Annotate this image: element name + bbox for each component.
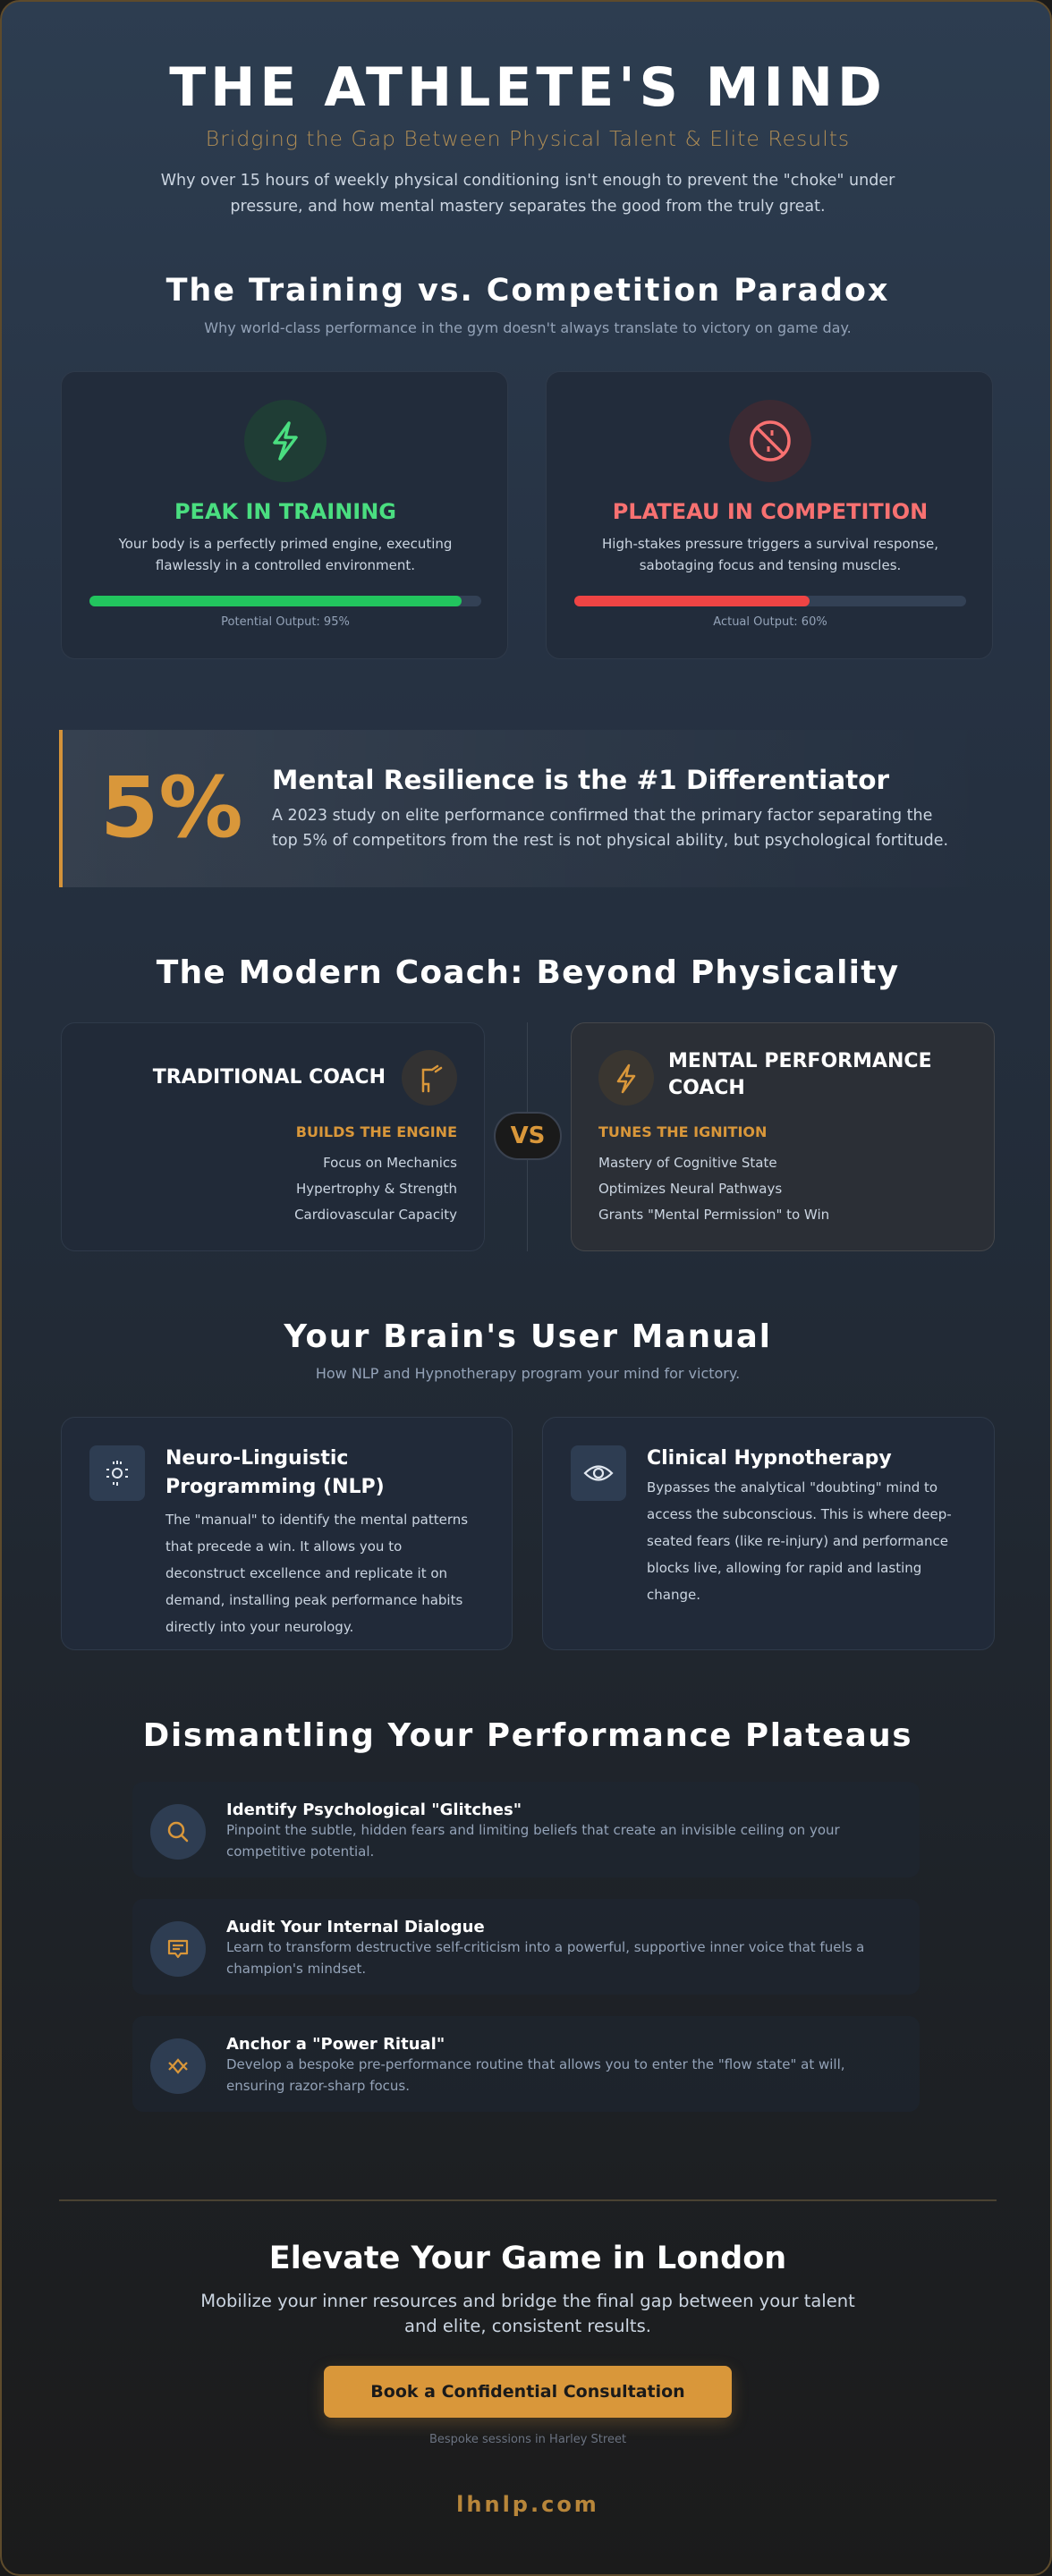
text: Pinpoint the subtle, hidden fears and limiting beliefs that create an invisible ceiling on your competitive potential. [226,1822,840,1860]
text: Identify Psychological "Glitches" [226,1801,522,1819]
icon: anchor star [150,2038,206,2094]
title [668,1050,932,1099]
text: Learn to transform destructive self-criticism into a powerful, supportive inner voice that fuels a champion's mindset. [226,1939,864,1977]
heading: CTA: Elevate Your Game in London [269,2241,786,2276]
label: BUILDS THE ENGINE [296,1123,457,1140]
title [165,1447,385,1498]
footer brand: lhnlp.com [456,2492,599,2517]
title: Programming (NLP) [165,1476,385,1498]
list: Cardiovascular Capacity [294,1207,457,1223]
title: THE ATHLETE'S MIND [169,56,887,119]
panel: plateau in competition [546,371,993,659]
title: MENTAL PERFORMANCE [668,1050,932,1072]
panel: peak in training [61,371,508,659]
description: High-stakes pressure triggers a survival response, sabotaging focus and tensing muscles. [602,536,938,573]
list: Mastery of Cognitive State [598,1155,777,1171]
heading: paradox: The Training vs. Competition Paradox [166,273,889,309]
title: TRADITIONAL COACH [153,1066,386,1089]
button: Book a Confidential Consultation [370,2382,685,2402]
title: PEAK IN TRAINING [174,499,396,524]
title: COACH [668,1077,745,1099]
icon: magnifier [150,1804,206,1860]
step: identify glitches [132,1782,920,1877]
progress bar 60% [574,596,966,606]
button note: Bespoke sessions in Harley Street [429,2433,626,2446]
callout: 5% statistic [59,730,997,887]
progress bar 95% [89,596,481,606]
text [226,1801,840,1860]
description: Your body is a perfectly primed engine, executing flawlessly in a controlled environment. [119,536,452,573]
button [324,2366,732,2418]
badge: VS [494,1112,562,1160]
list [294,1155,457,1223]
text [226,2035,845,2094]
subheading: user manual: How NLP and Hypnotherapy program your mind for victory. [316,1365,740,1382]
heading: user manual: Your Brain's User Manual [284,1318,772,1355]
icon: blocked red [729,400,811,482]
panel: traditional coach [61,1022,485,1251]
label: TUNES THE IGNITION [598,1123,767,1140]
bar label: Actual Output: 60% [713,615,827,629]
CTA text: Mobilize your inner resources and bridge the final gap between your talent and elite, consistent results. [200,2291,855,2336]
title: Clinical Hypnotherapy [647,1447,892,1470]
panel: mental performance coach [571,1022,995,1251]
list [598,1155,829,1223]
heading: plateaus: Dismantling Your Performance Plateaus [143,1717,912,1754]
icon: lightning green [244,400,327,482]
stat text: A 2023 study on elite performance confirmed that the primary factor separating the top 5% of competitors from the rest is not physical ability, but psychological fortitude. [272,807,948,850]
list: Focus on Mechanics [323,1155,457,1171]
text: Audit Your Internal Dialogue [226,1918,485,1936]
icon: dumbbell [402,1050,457,1106]
bar label: Potential Output: 95% [221,615,350,629]
subheading: paradox: Why world-class performance in the gym doesn't always translate to victory on game day. [204,319,852,336]
text: Anchor a "Power Ritual" [226,2035,445,2054]
badge: VS: VS [511,1123,545,1149]
step: audit dialogue [132,1899,920,1995]
icon: eye [571,1445,626,1501]
step: power ritual [132,2016,920,2112]
subtitle: Bridging the Gap Between Physical Talent & Elite Results [206,126,850,151]
heading: modern coach: The Modern Coach: Beyond Physicality [157,954,899,991]
icon: lightning gold [598,1050,654,1106]
icon: chat [150,1921,206,1977]
stat heading: Mental Resilience is the #1 Differentiator [272,765,889,795]
icon: sun/gear [89,1445,145,1501]
text: Develop a bespoke pre-performance routine that allows you to enter the "flow state" at will, ensuring razor-sharp focus. [226,2056,845,2094]
title: PLATEAU IN COMPETITION [613,499,928,524]
big number: 5% [100,759,243,857]
list: Hypertrophy & Strength [296,1181,457,1197]
panel: hypnotherapy [542,1417,995,1650]
list: Grants "Mental Permission" to Win [598,1207,829,1223]
list: Optimizes Neural Pathways [598,1181,782,1197]
intro text: Why over 15 hours of weekly physical conditioning isn't enough to prevent the "choke" under pressure, and how mental mastery separates the good from the truly great. [161,172,895,216]
text [226,1918,864,1977]
panel: NLP [61,1417,513,1650]
title: Neuro-Linguistic [165,1447,348,1470]
body: The "manual" to identify the mental patterns that precede a win. It allows you to deconstruct excellence and replicate it on demand, installing peak performance habits directly into your neurology. [165,1512,468,1635]
body: Bypasses the analytical "doubting" mind to access the subconscious. This is where deep-seated fears (like re-injury) and performance blocks live, allowing for rapid and lasting change. [647,1479,952,1603]
